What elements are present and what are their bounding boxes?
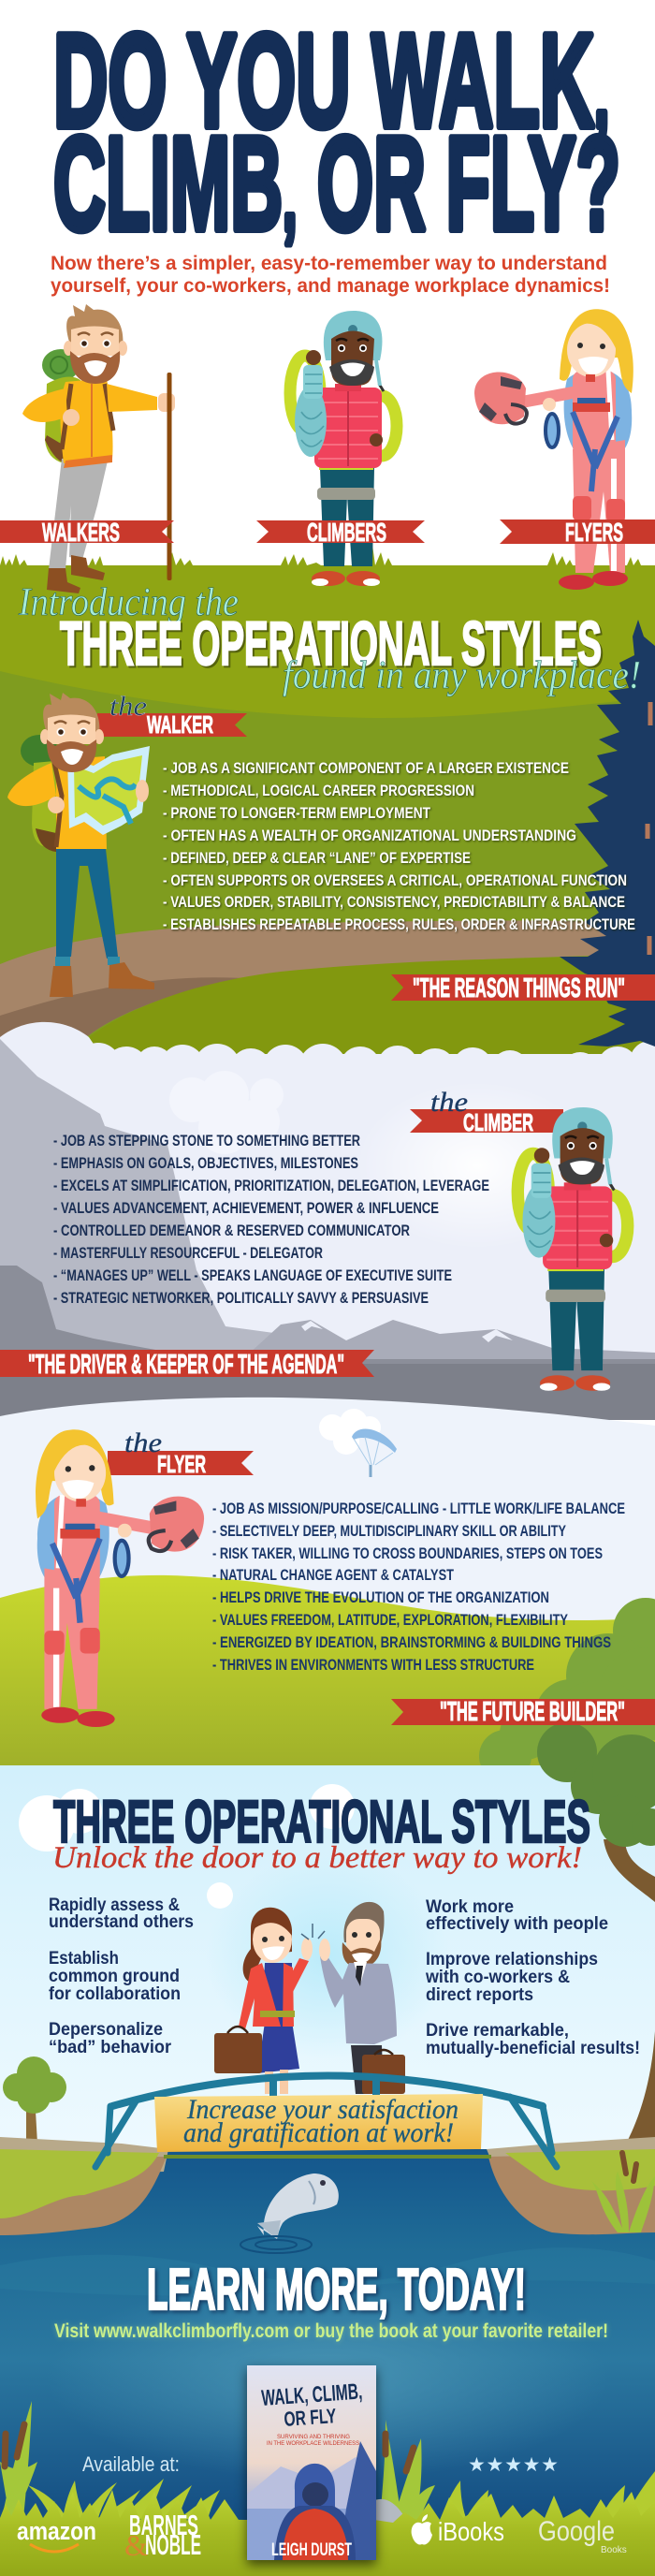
benefits: right column: Work more [426,1897,514,1917]
script heading: introducing the: Introducing the [18,581,239,624]
logo: barnes and noble [124,2509,201,2562]
panel: walker section ground [0,545,655,1061]
high five spark [301,1924,325,1939]
label: available at: Available at: [82,2452,180,2476]
sign: increase your satisfaction: Increase your satisfaction [186,2094,458,2125]
list: flyer traits: - HELPS DRIVE THE EVOLUTION OF THE ORGANIZATION [212,1589,549,1606]
list: climber traits: - EMPHASIS ON GOALS, OBJECTIVES, MILESTONES [53,1155,358,1172]
mountain cliff [0,1039,655,1420]
subtitle [51,253,610,297]
sign: increase your satisfaction: and gratification at work! [183,2117,454,2148]
subtitle: Now there’s a simpler, easy-to-remember way to understand [51,253,607,274]
banner: the walker [97,691,247,739]
logo: ibooks: iBooks [438,2517,504,2546]
background: white header [0,0,655,565]
benefits: left column: for collaboration [49,1984,181,2004]
ground strips and banks [0,2137,655,2235]
banner: the climber [410,1087,563,1136]
small tree [3,2056,66,2144]
benefits: left column: understand others [49,1912,194,1932]
list: walker traits: - OFTEN HAS A WEALTH OF ORGANIZATIONAL UNDERSTANDING [163,827,576,844]
rating stars: ★★★★★ [468,2453,559,2476]
banner: walkers: WALKERS [42,518,120,547]
list: climber traits: - MASTERFULLY RESOURCEFUL - DELEGATOR [53,1245,323,1262]
benefits: right column: mutually-beneficial results! [426,2039,640,2058]
benefits: left column: Establish [49,1949,119,1969]
banner: the driver and keeper of the agenda: "THE DRIVER & KEEPER OF THE AGENDA" [28,1350,344,1380]
list: flyer traits: - NATURAL CHANGE AGENT & CATALYST [212,1567,454,1584]
benefits: right column: with co-workers & [425,1968,570,1987]
illustration: leaping fish [240,2174,339,2253]
small clouds [169,1071,284,1154]
book cover [247,2365,376,2560]
book cover: WALK, CLIMB, [261,2379,363,2411]
benefits: right column: effectively with people [426,1914,608,1934]
list: climber traits: - EXCELS AT SIMPLIFICATION, PRIORITIZATION, DELEGATION, LEVERAGE [53,1178,489,1194]
big tree [537,1722,655,2149]
title [53,7,620,258]
list: walker traits: - JOB AS A SIGNIFICANT COMPONENT OF A LARGER EXISTENCE [163,760,569,777]
benefits: left column: Rapidly assess & [49,1895,180,1915]
illustration: flyer with helmet [474,309,633,590]
logo: barnes and noble: NOBLE [145,2528,201,2561]
cattails: right bank [591,2153,655,2232]
panel: climber section sky and clouds [0,1022,655,1419]
benefits: right column: direct reports [426,1985,533,2005]
list: walker traits [163,760,635,933]
list: climber traits: - JOB AS STEPPING STONE TO SOMETHING BETTER [53,1133,360,1149]
parachute [319,1409,397,1477]
banner: the flyer: the [124,1427,162,1458]
banner: climbers: CLIMBERS [307,518,386,547]
list: climber traits: - VALUES ADVANCEMENT, ACHIEVEMENT, POWER & INFLUENCE [53,1200,439,1217]
banner: the climber: the [430,1087,468,1118]
grass foreground [0,2471,655,2576]
illustration: man with briefcase [319,1902,405,2094]
book cover: SURVIVING AND THRIVING [277,2434,350,2440]
bridge [95,2076,557,2167]
book cover: IN THE WORKPLACE WILDERNESS [267,2440,360,2447]
benefits: right column: Improve relationships [426,1950,598,1969]
illustration: flyer full figure [36,1429,204,1727]
list: walker traits: - PRONE TO LONGER-TERM EMPLOYMENT [163,805,430,822]
list: climber traits: - STRATEGIC NETWORKER, POLITICALLY SAVVY & PERSUASIVE [53,1290,429,1307]
script heading: found in any workplace: found in any workplace! [283,654,641,697]
banner: the driver and keeper of the agenda [0,1350,374,1380]
bottom cattails and rock [0,2401,435,2551]
list: climber traits [53,1133,489,1307]
illustration: walker with map [7,693,154,997]
illustration: climber full figure [517,1107,628,1391]
green hill [0,1575,655,1769]
banner: the walker: WALKER [147,710,213,739]
benefits: left column: Depersonalize [49,2020,163,2040]
banner: the flyer [108,1427,254,1478]
banner: the walker: the [109,691,147,722]
water [0,2149,655,2533]
book cover: OR FLY [284,2404,337,2431]
logo: google books: Google [538,2516,615,2547]
list: climber traits: - “MANAGES UP” WELL - SPEAKS LANGUAGE OF EXECUTIVE SUITE [53,1267,452,1284]
script tagline: Unlock the door to a better way to work! [52,1841,582,1875]
logo: barnes and noble: & [124,2528,148,2562]
list: flyer traits [212,1500,625,1674]
benefits: left column: “bad” behavior [49,2038,172,2057]
logo: google books: Books [601,2545,627,2555]
logo: ibooks [412,2514,504,2546]
book cover: LEIGH DURST [271,2540,352,2560]
list: walker traits: - DEFINED, DEEP & CLEAR “LANE” OF EXPERTISE [163,850,471,867]
logo: barnes and noble: BARNES [129,2509,198,2541]
panel: flyer section sky [0,1398,655,1769]
banner: flyers [500,518,655,547]
illustration: woman with briefcase [214,1908,313,2094]
benefits: left column: common ground [49,1967,180,1986]
subtitle: yourself, your co-workers, and manage workplace dynamics! [51,275,610,297]
pine tree [560,620,655,1046]
banner: the flyer: FLYER [157,1450,206,1478]
illustration: climber with rope [290,311,397,586]
list: flyer traits: - THRIVES IN ENVIRONMENTS WITH LESS STRUCTURE [212,1657,534,1674]
bush [479,1598,655,1783]
list: climber traits: - CONTROLLED DEMEANOR & RESERVED COMMUNICATOR [53,1222,410,1239]
logo: amazon: amazon [17,2517,96,2545]
list: walker traits: - METHODICAL, LOGICAL CAREER PROGRESSION [163,783,474,799]
benefits: left column [49,1895,194,2057]
sign: increase your satisfaction [154,2094,483,2152]
benefits: right column: Drive remarkable, [426,2021,569,2041]
banner: climbers [256,518,425,547]
illustration: walker with trekking pole [22,304,175,593]
benefits: right column [425,1897,640,2058]
panel: benefits section sky [0,1765,655,2168]
banner: the climber: CLIMBER [463,1108,533,1136]
